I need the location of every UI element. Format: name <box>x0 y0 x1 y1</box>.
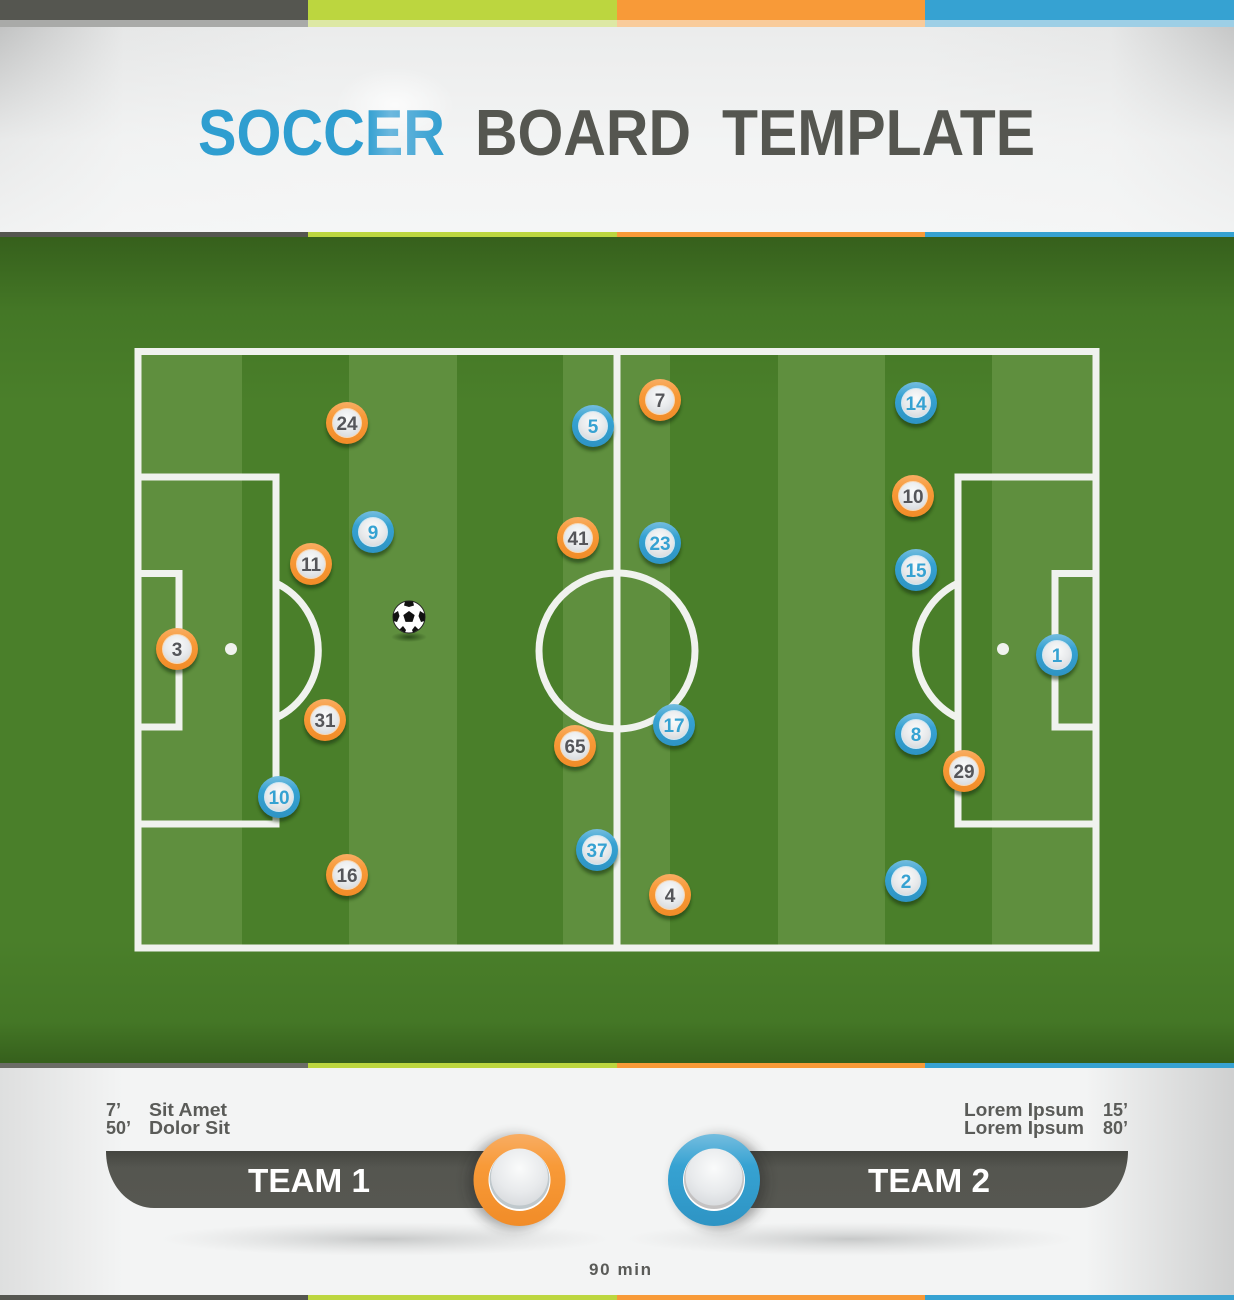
player 8 <box>895 713 937 759</box>
team 1 events: Dolor Sit <box>149 1118 230 1138</box>
player 8: 8 <box>911 725 921 746</box>
player 15 <box>895 549 937 595</box>
title: TEMPLATE <box>722 96 1035 169</box>
player 11: 11 <box>301 555 321 576</box>
team 1 players (orange) <box>156 379 985 920</box>
player 10 <box>258 776 300 822</box>
player 37: 37 <box>586 841 608 862</box>
player 31 <box>304 699 346 745</box>
player 7 <box>639 379 681 425</box>
player 23 <box>639 522 681 568</box>
team 2 events: Lorem Ipsum <box>964 1100 1084 1120</box>
header lower colour strip <box>0 232 1234 237</box>
player 24 <box>326 402 368 448</box>
player 3: 3 <box>172 640 182 661</box>
player 10: 10 <box>268 788 290 809</box>
team 1 events: Sit Amet <box>149 1100 227 1120</box>
player 3 <box>156 628 198 674</box>
player 10 <box>892 475 934 521</box>
player 4 <box>649 874 691 920</box>
match time: 90 min <box>589 1260 651 1279</box>
penalty spots <box>225 643 1009 655</box>
player 41: 41 <box>567 529 589 550</box>
header panel <box>0 27 1234 232</box>
player 5: 5 <box>588 417 599 438</box>
player 4: 4 <box>665 886 676 907</box>
player 14: 14 <box>905 394 927 415</box>
footer top colour strip <box>0 1063 1234 1068</box>
player 16 <box>326 854 368 900</box>
player 5 <box>572 405 614 451</box>
bottom colour band <box>0 1295 1234 1300</box>
team 1 bar <box>106 1151 500 1208</box>
team 2 players (blue) <box>258 382 1078 906</box>
player 17 <box>653 704 695 750</box>
player 15: 15 <box>905 561 927 582</box>
team 1 events: 7’ <box>106 1100 121 1120</box>
pitch <box>138 351 1096 948</box>
team 2 events: 80’ <box>1103 1118 1128 1138</box>
pitch markings <box>138 351 1096 948</box>
player 10: 10 <box>902 487 924 508</box>
team 2 label: TEAM 2 <box>868 1162 990 1199</box>
title: SOCCER <box>198 96 445 169</box>
player 16: 16 <box>336 866 358 887</box>
team 1 label: TEAM 1 <box>248 1162 370 1199</box>
player 29: 29 <box>953 762 975 783</box>
grass background <box>0 237 1234 1063</box>
player 23: 23 <box>649 534 671 555</box>
team 2 score badge <box>668 1134 766 1228</box>
player 65: 65 <box>564 737 586 758</box>
team 2 bar <box>735 1151 1128 1208</box>
player 2: 2 <box>901 872 911 893</box>
team 2 events: 15’ <box>1103 1100 1128 1120</box>
player 7: 7 <box>655 391 665 412</box>
player 65 <box>554 725 596 771</box>
player 1 <box>1036 634 1078 680</box>
pitch stripes <box>138 352 1096 948</box>
title <box>198 96 1035 169</box>
team 2 events <box>964 1100 1128 1138</box>
title: BOARD <box>475 96 691 169</box>
team 2 events: Lorem Ipsum <box>964 1118 1084 1138</box>
player 17: 17 <box>663 716 685 737</box>
player 1: 1 <box>1052 646 1063 667</box>
player 11 <box>290 543 332 589</box>
player 29 <box>943 750 985 796</box>
footer panel <box>0 1068 1234 1295</box>
player 24: 24 <box>336 414 358 435</box>
team 1 events <box>106 1100 230 1138</box>
player 14 <box>895 382 937 428</box>
player 9: 9 <box>368 523 378 544</box>
player 31: 31 <box>314 711 336 732</box>
team 1 events: 50’ <box>106 1118 131 1138</box>
top colour band <box>0 0 1234 27</box>
player 41 <box>557 517 599 563</box>
player 37 <box>576 829 618 875</box>
team 1 score badge <box>468 1134 566 1228</box>
player 2 <box>885 860 927 906</box>
icon: soccer ball <box>391 601 427 642</box>
player 9 <box>352 511 394 557</box>
